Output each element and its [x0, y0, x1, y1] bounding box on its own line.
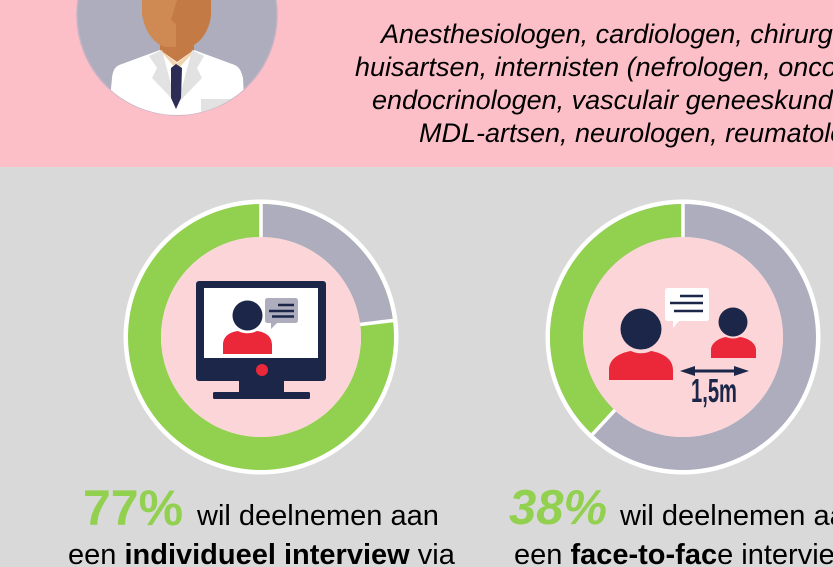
- icon: two people at 1.5 m distance: 1,5m: [691, 372, 737, 409]
- header band: [0, 0, 833, 167]
- icon: doctor portrait: [76, 0, 278, 116]
- donut chart: 38% face-to-face interview: [546, 200, 820, 474]
- caption: 38%: [509, 481, 833, 567]
- statistic: 77%: 77%: [83, 480, 183, 536]
- donut chart: 77% individual interview: [124, 200, 398, 474]
- header text: [355, 19, 833, 148]
- icon: monitor with video call: [196, 281, 326, 399]
- icon: two people at 1.5 m distance: [609, 288, 756, 409]
- caption: 77%: [68, 480, 455, 567]
- caption text line one: wil deelnemen aan: [197, 500, 439, 532]
- statistic: 38%: 38%: [509, 481, 607, 535]
